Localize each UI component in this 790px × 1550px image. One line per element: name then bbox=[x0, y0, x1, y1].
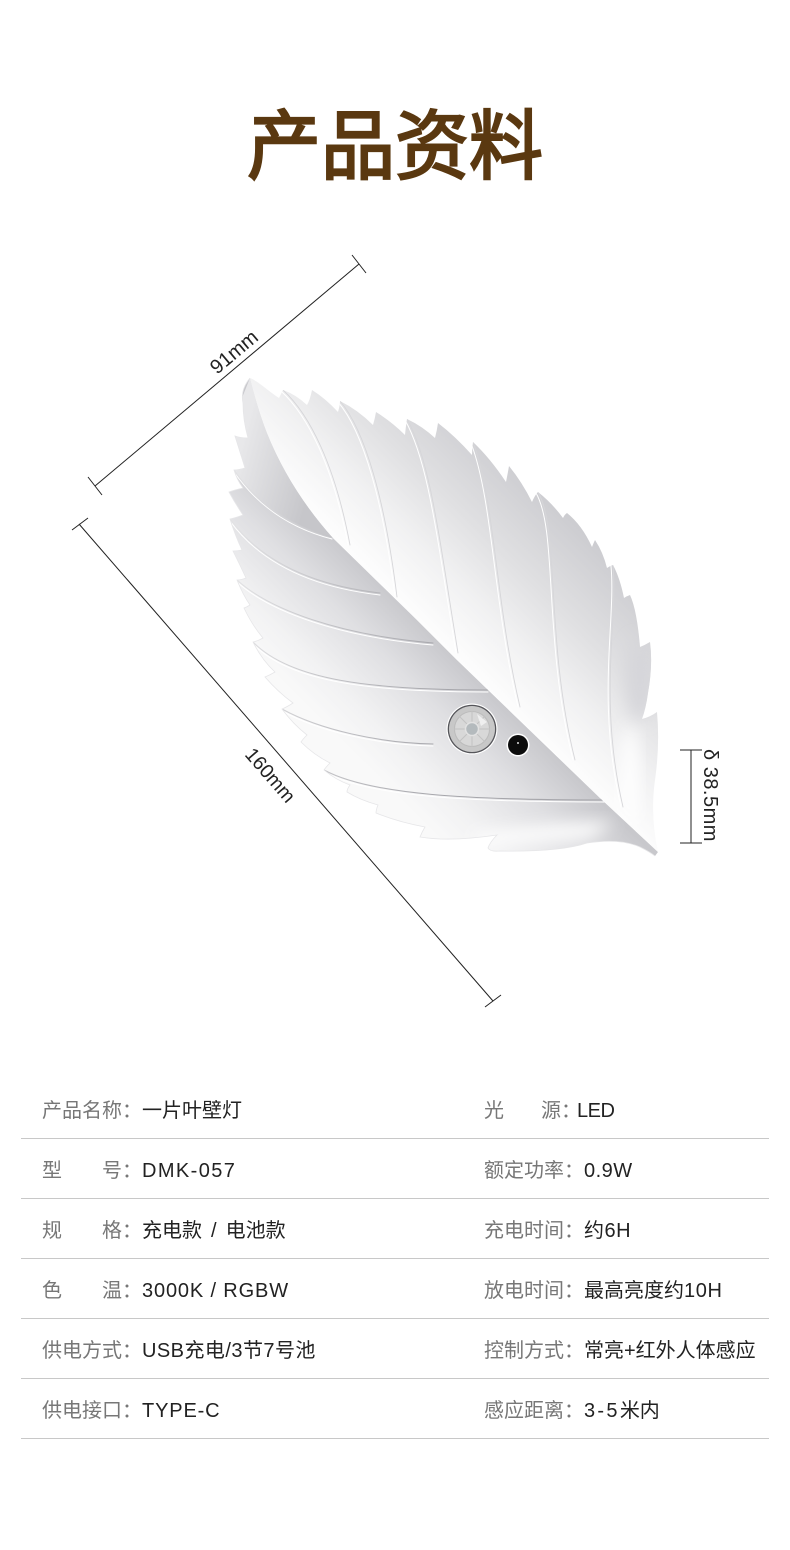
row 1: 一片叶壁灯 bbox=[142, 1100, 242, 1122]
row 4: 温： bbox=[102, 1280, 142, 1302]
row 6 bbox=[21, 1378, 769, 1439]
row 5: USB充电/3节7号池 bbox=[142, 1340, 316, 1362]
row 2: 号： bbox=[102, 1160, 142, 1182]
row 2: 0.9W bbox=[584, 1160, 633, 1182]
row 5: 常亮+红外人体感应 bbox=[584, 1340, 756, 1362]
row 1 bbox=[21, 1078, 769, 1139]
row 2: DMK-057 bbox=[142, 1160, 236, 1182]
row 1: LED bbox=[577, 1100, 614, 1122]
row 4: 色 bbox=[42, 1280, 62, 1302]
row 5: 控制方式： bbox=[484, 1340, 584, 1362]
row 2: 额定功率： bbox=[484, 1160, 584, 1182]
dimension: 91mm bbox=[88, 255, 366, 495]
row 6: 供电接口： bbox=[42, 1400, 142, 1422]
row 5: 供电方式： bbox=[42, 1340, 142, 1362]
row 6: 感应距离： bbox=[484, 1400, 584, 1422]
title: 产品资料 bbox=[247, 104, 543, 189]
row 3: 约6H bbox=[584, 1220, 631, 1242]
PIR motion sensor bbox=[446, 704, 498, 754]
dimension: 38.5mm diameter: δ 38.5mm bbox=[699, 749, 721, 842]
row 1: 产品名称： bbox=[42, 1100, 142, 1122]
row 2: 型 bbox=[42, 1160, 62, 1182]
leaf upper half bbox=[250, 378, 658, 852]
row 5 bbox=[21, 1318, 769, 1379]
leaf lamp bbox=[220, 370, 670, 870]
row 6: TYPE-C bbox=[142, 1400, 220, 1422]
specification table bbox=[21, 1100, 769, 1439]
dimension: 91mm: 91mm bbox=[206, 326, 263, 379]
dimension: 160mm: 160mm bbox=[240, 744, 299, 807]
row 2 bbox=[21, 1138, 769, 1199]
row 6: 3-5米内 bbox=[584, 1400, 660, 1422]
row 1: 光 bbox=[484, 1100, 504, 1122]
row 4: 放电时间： bbox=[484, 1280, 584, 1302]
dimension: 38.5mm diameter bbox=[680, 749, 721, 843]
row 3: 充电款 / 电池款 bbox=[142, 1220, 286, 1242]
row 3 bbox=[21, 1198, 769, 1259]
row 3: 充电时间： bbox=[484, 1220, 584, 1242]
leaf lower edge outline bbox=[229, 378, 655, 856]
row 3: 格： bbox=[102, 1220, 142, 1242]
dimension: 160mm bbox=[72, 518, 501, 1007]
row 1: 源： bbox=[541, 1100, 581, 1122]
product diagram bbox=[72, 254, 721, 1008]
row 4: 3000K / RGBW bbox=[142, 1280, 289, 1302]
light sensor bbox=[506, 734, 530, 756]
row 4 bbox=[21, 1258, 769, 1319]
row 4: 最高亮度约10H bbox=[584, 1280, 722, 1302]
leaf lower half bbox=[220, 370, 670, 870]
row 3: 规 bbox=[42, 1220, 62, 1242]
